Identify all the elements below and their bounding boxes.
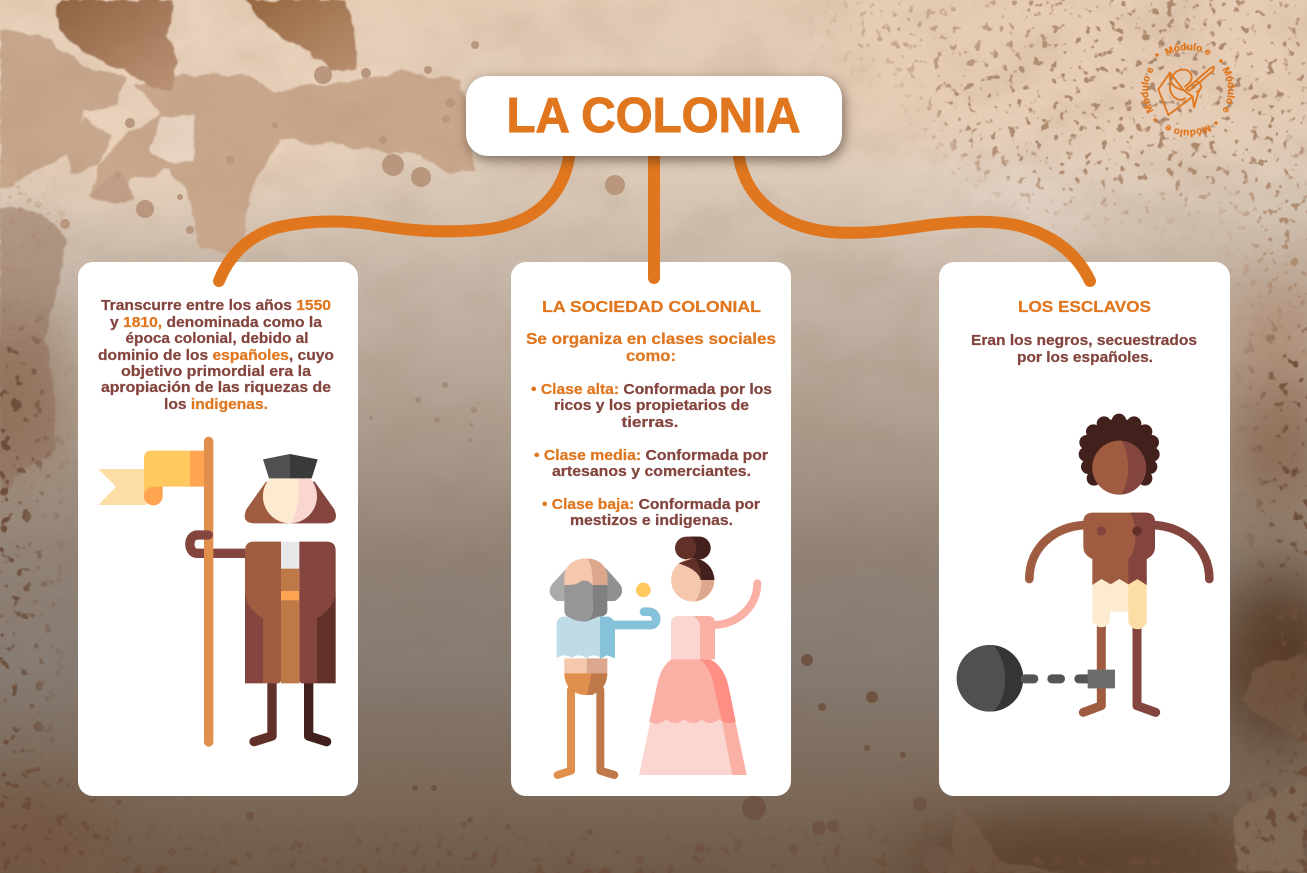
connector: title to right card: [738, 150, 1090, 281]
text block: clase baja: • Clase baja: Conformada por: [542, 496, 760, 513]
text block: colonial period description: dominio de los españoles, cuyo: [98, 347, 334, 364]
text block: clase baja: mestizos e indigenas.: [570, 512, 733, 529]
text block: clase baja: [542, 496, 760, 529]
text block: colonial period description: época colonial, debido al: [126, 330, 308, 347]
heading: los esclavos: LOS ESCLAVOS: [1018, 299, 1151, 316]
logo: Módulo e stamp: Módulo e: [1164, 42, 1210, 56]
logo: Módulo e stamp: Módulo e: [1140, 68, 1154, 114]
subheading: clases sociales: como:: [626, 348, 676, 365]
icon: enslaved man with ball and chain: [957, 414, 1209, 712]
text block: colonial period description: objetivo primordial era la: [121, 363, 312, 380]
text block: clase alta: tierras.: [622, 414, 678, 431]
panel: right card: [939, 262, 1230, 796]
logo: Módulo e stamp: Módulo e: [1166, 124, 1212, 138]
connector: title to left card: [219, 150, 570, 281]
text block: colonial period description: y 1810, denominada como la: [110, 314, 323, 331]
connector: title to center card: [648, 150, 660, 278]
text block: clase media: • Clase media: Conformada por: [534, 447, 768, 464]
title: [466, 76, 842, 156]
text block: enslaved people description: [971, 332, 1197, 366]
title: LA COLONIA: [506, 89, 800, 143]
icon: colonist with flag: [98, 437, 336, 747]
text block: clase alta: [531, 381, 772, 431]
text block: colonial period description: los indigenas.: [164, 396, 268, 413]
text block: colonial period description: apropiación de las riquezas de: [101, 379, 331, 396]
text block: enslaved people description: por los españoles.: [1017, 349, 1153, 366]
icon: man and woman of colonial society: [550, 537, 757, 775]
text block: enslaved people description: Eran los negros, secuestrados: [971, 332, 1197, 349]
logo: Módulo e stamp: [1140, 42, 1236, 138]
subheading: clases sociales: [526, 331, 776, 365]
logo: Módulo e stamp: Módulo e: [1222, 66, 1236, 112]
text block: colonial period description: Transcurre entre los años 1550: [101, 297, 331, 314]
panel: center card: [511, 262, 791, 796]
heading: la sociedad colonial: LA SOCIEDAD COLONIAL: [542, 299, 761, 316]
panel: left card: [78, 262, 358, 796]
text block: clase media: artesanos y comerciantes.: [552, 463, 751, 480]
text block: clase alta: • Clase alta: Conformada por los: [531, 381, 772, 398]
text block: clase media: [534, 447, 768, 480]
text block: clase alta: ricos y los propietarios de: [554, 397, 749, 414]
text block: colonial period description: [98, 297, 334, 413]
subheading: clases sociales: Se organiza en clases sociales: [526, 331, 776, 348]
